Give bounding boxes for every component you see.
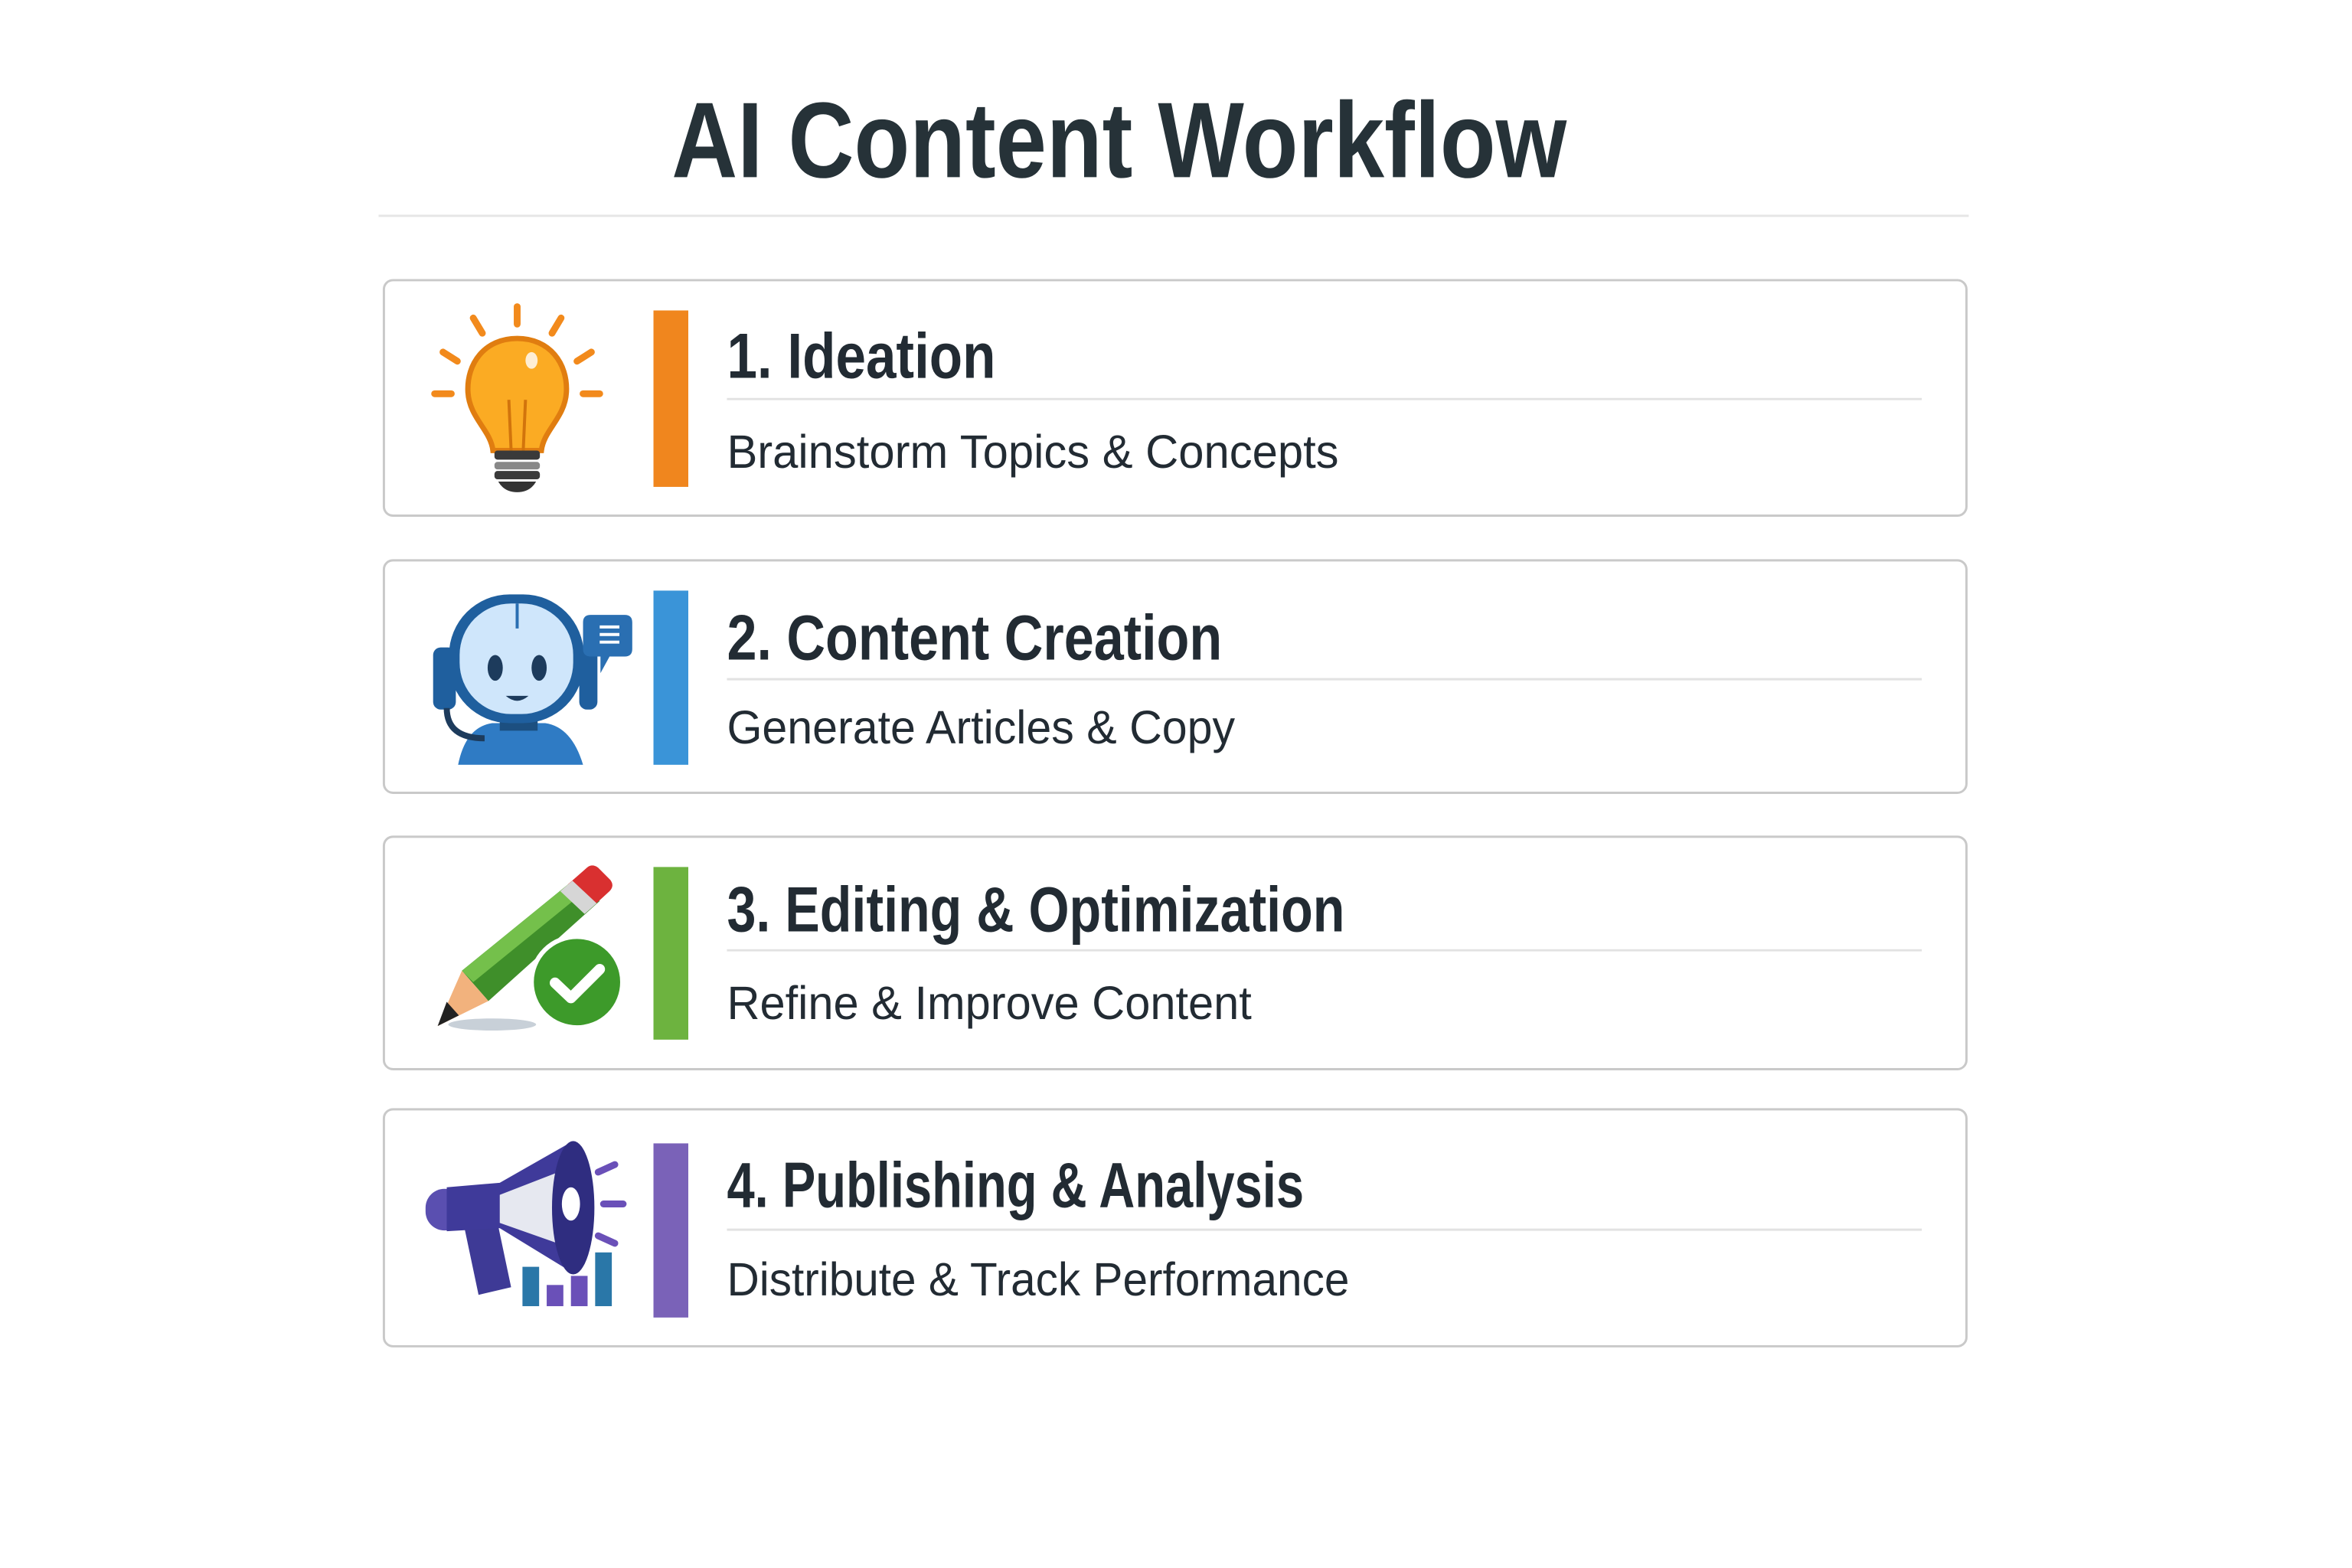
heading: 3. Editing & Optimization: 3. Editing & Optimization	[727, 874, 1344, 945]
heading: 1. Ideation: 1. Ideation	[727, 321, 996, 392]
panel: editing	[384, 837, 1966, 1069]
title: AI Content Workflow	[671, 80, 1567, 200]
icon: lightbulb	[435, 307, 599, 492]
panel: ideation	[384, 280, 1966, 516]
color bar: orange	[654, 310, 688, 487]
subtitle: Brainstorm Topics & Concepts	[727, 425, 1339, 478]
color bar: blue	[654, 590, 688, 765]
panel: content creation	[384, 560, 1966, 792]
subtitle: Generate Articles & Copy	[727, 701, 1235, 753]
panel: publishing	[384, 1109, 1966, 1346]
heading: 4. Publishing & Analysis: 4. Publishing & Analysis	[727, 1149, 1304, 1220]
heading: 2. Content Creation: 2. Content Creation	[727, 602, 1222, 673]
subtitle: Refine & Improve Content	[727, 976, 1252, 1029]
icon: pencil with check	[438, 865, 622, 1031]
color bar: green	[654, 867, 688, 1040]
icon: megaphone with bars	[426, 1141, 623, 1306]
icon: robot	[433, 594, 632, 765]
subtitle: Distribute & Track Performance	[727, 1253, 1349, 1305]
color bar: purple	[654, 1143, 688, 1318]
